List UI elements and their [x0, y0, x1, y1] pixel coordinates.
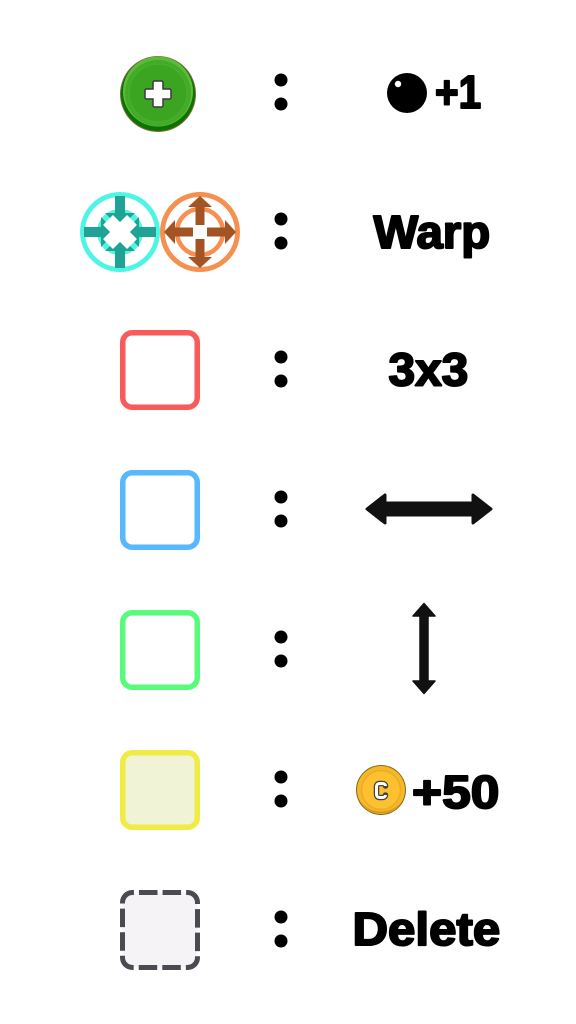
row 7: dashed grey square: [122, 892, 198, 968]
row 4: blue square: [123, 473, 197, 547]
row 3: 3x3 label: 3x3: [388, 344, 468, 395]
row 3: red square: [123, 333, 197, 407]
row 5: green square: [123, 613, 197, 687]
row 1: plus one label: +1: [435, 68, 481, 119]
row 6: gold coin icon: [356, 765, 406, 815]
colon 3: [274, 350, 288, 388]
row 2: teal warp icon: [82, 194, 158, 270]
row 1: green plus button: [120, 56, 196, 132]
colon 7: [274, 910, 288, 948]
row 6: plus fifty label: +50: [412, 767, 499, 818]
colon 1: [274, 74, 288, 110]
row 6: yellow square: [123, 753, 197, 827]
colon 2: [274, 212, 288, 250]
colon 6: [274, 770, 288, 808]
row 4: horizontal double arrow: [367, 495, 491, 523]
colon 5: [274, 630, 288, 668]
row 2: orange warp icon: [162, 194, 238, 270]
row 5: vertical double arrow: [413, 604, 435, 694]
row 2: warp label: Warp: [374, 207, 490, 258]
row 1: black ball icon: [387, 73, 427, 113]
row 7: delete label: Delete: [352, 904, 500, 956]
colon 4: [274, 490, 288, 528]
